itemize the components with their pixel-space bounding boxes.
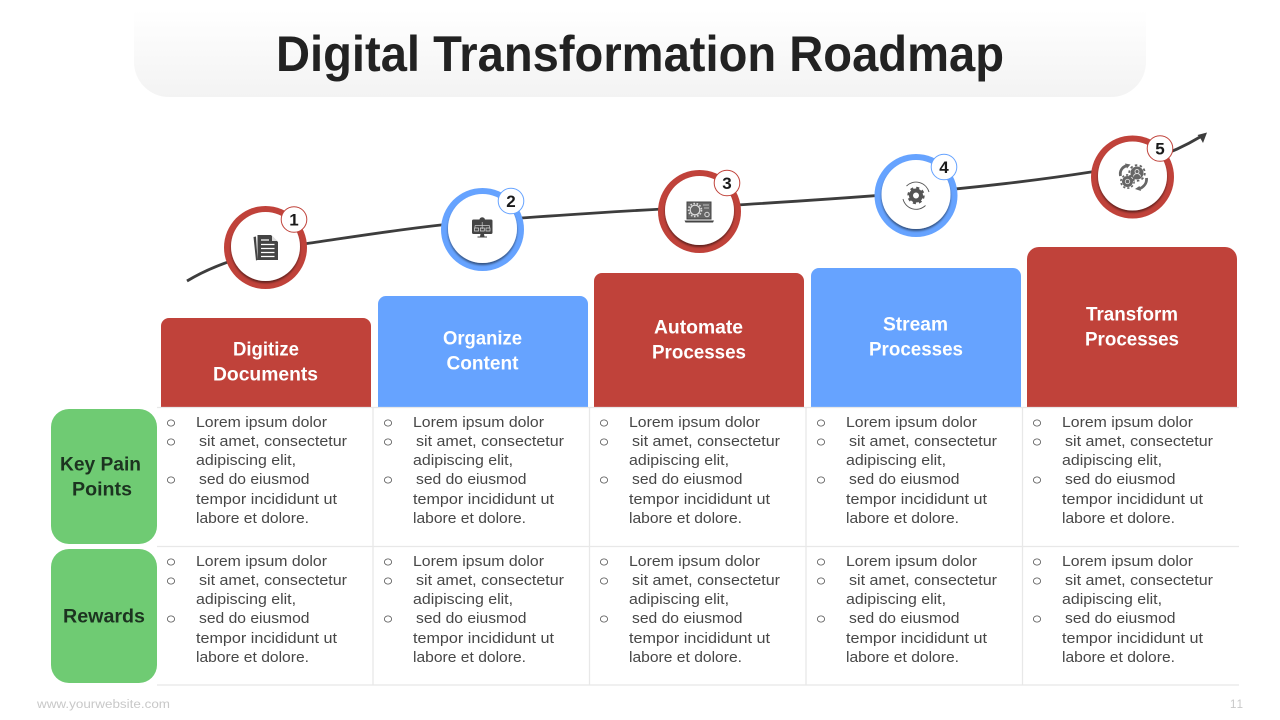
header: Automate Processes — [594, 273, 804, 407]
cell: row 1 column 4: Lorem ipsum dolor — [846, 415, 977, 431]
cell: row 2 column 3: labore et dolore. — [629, 650, 742, 666]
cell: row 1 column 2: sit amet, consectetur — [416, 434, 564, 450]
cell: row 1 column 4: sed do eiusmod — [849, 472, 960, 488]
cell: row 2 column 5: tempor incididunt ut — [1062, 631, 1203, 647]
row label: Rewards — [51, 549, 157, 683]
cell: row 2 column 5: labore et dolore. — [1062, 650, 1175, 666]
header: Automate Processes: Processes — [652, 342, 746, 364]
row label: Rewards: Rewards — [63, 606, 145, 628]
cell: row 2 column 2: sit amet, consectetur — [416, 573, 564, 589]
cell: row 2 column 2: sed do eiusmod — [416, 611, 526, 627]
badge 4: 4 — [939, 158, 949, 177]
header: Organize Content: Content — [446, 354, 519, 374]
cell: row 1 column 2 — [384, 415, 564, 527]
cell: row 2 column 4: labore et dolore. — [846, 650, 959, 666]
cell: row 1 column 3: sed do eiusmod — [632, 472, 742, 488]
cell: row 2 column 4: sed do eiusmod — [849, 611, 960, 627]
cell: row 1 column 3: adipiscing elit, — [629, 453, 729, 469]
cell: row 1 column 2: Lorem ipsum dolor — [413, 415, 544, 431]
cell: row 2 column 2: Lorem ipsum dolor — [413, 554, 544, 570]
badge 5: 5 — [1155, 140, 1165, 158]
badge 3: 3 — [722, 174, 732, 193]
cell: row 1 column 5: sit amet, consectetur — [1065, 434, 1213, 450]
cell: row 1 column 1: sit amet, consectetur — [199, 434, 347, 450]
cell: row 2 column 1 — [167, 554, 347, 666]
row label: Key Pain Points: Key Pain — [60, 454, 141, 476]
cell: row 2 column 1: sed do eiusmod — [199, 611, 310, 627]
header: Stream Processes: Processes — [869, 340, 963, 360]
cell: row 2 column 1: Lorem ipsum dolor — [196, 554, 327, 570]
cell: row 1 column 3: Lorem ipsum dolor — [629, 415, 760, 431]
cell: row 1 column 1: adipiscing elit, — [196, 453, 296, 469]
cell: row 2 column 3: sit amet, consectetur — [632, 573, 780, 589]
cell: row 1 column 2: tempor incididunt ut — [413, 492, 554, 508]
header: Transform Processes — [1027, 247, 1237, 407]
cell: row 1 column 3 — [600, 415, 780, 527]
cell: row 2 column 5: adipiscing elit, — [1062, 592, 1162, 608]
cell: row 1 column 5: adipiscing elit, — [1062, 453, 1162, 469]
cell: row 1 column 5: Lorem ipsum dolor — [1062, 415, 1193, 431]
header: Stream Processes: Stream — [883, 314, 948, 336]
cell: row 2 column 3: tempor incididunt ut — [629, 631, 770, 647]
cell: row 1 column 5: labore et dolore. — [1062, 511, 1175, 527]
icon: laptop with gears — [684, 202, 714, 222]
cell: row 2 column 2: labore et dolore. — [413, 650, 526, 666]
cell: row 1 column 5 — [1033, 415, 1213, 527]
header: Automate Processes: Automate — [654, 318, 743, 338]
cell: row 1 column 4: labore et dolore. — [846, 511, 959, 527]
header: Transform Processes: Processes — [1085, 330, 1179, 350]
title: Digital Transformation Roadmap — [276, 26, 1004, 82]
cell: row 1 column 4 — [817, 415, 997, 527]
page number: 11 — [1230, 699, 1243, 711]
cell: row 2 column 4 — [817, 554, 997, 666]
cell: row 2 column 2: adipiscing elit, — [413, 592, 513, 608]
step 3 marker — [658, 170, 741, 253]
cell: row 2 column 3: sed do eiusmod — [632, 611, 742, 627]
header: Digitize Documents — [161, 318, 371, 407]
step 1 marker — [224, 206, 307, 289]
table grid — [157, 408, 1239, 685]
cell: row 2 column 5: sed do eiusmod — [1065, 611, 1176, 627]
title banner — [134, 10, 1146, 97]
header: Stream Processes — [811, 268, 1021, 407]
cell: row 1 column 3: labore et dolore. — [629, 511, 742, 527]
cell: row 1 column 4: tempor incididunt ut — [846, 492, 987, 508]
cell: row 2 column 1: labore et dolore. — [196, 650, 309, 666]
cell: row 2 column 2 — [384, 554, 564, 666]
cell: row 1 column 1: sed do eiusmod — [199, 472, 310, 488]
cell: row 2 column 3: Lorem ipsum dolor — [629, 554, 760, 570]
cell: row 1 column 5: tempor incididunt ut — [1062, 492, 1203, 508]
cell: row 1 column 3: sit amet, consectetur — [632, 434, 780, 450]
cell: row 1 column 4: sit amet, consectetur — [849, 434, 997, 450]
row label: Key Pain Points — [51, 409, 157, 544]
cell: row 2 column 4: adipiscing elit, — [846, 592, 946, 608]
row label: Key Pain Points: Points — [72, 480, 132, 500]
cell: row 1 column 2: labore et dolore. — [413, 511, 526, 527]
icon: gears with arrows — [1120, 164, 1147, 191]
cell: row 1 column 1: Lorem ipsum dolor — [196, 415, 327, 431]
cell: row 2 column 5 — [1033, 554, 1213, 666]
cell: row 2 column 5: Lorem ipsum dolor — [1062, 554, 1193, 570]
badge 2: 2 — [506, 192, 516, 211]
cell: row 2 column 4: tempor incididunt ut — [846, 631, 987, 647]
icon: gear with cycle arrows — [903, 182, 929, 209]
cell: row 2 column 1: tempor incididunt ut — [196, 631, 337, 647]
cell: row 1 column 3: tempor incididunt ut — [629, 492, 770, 508]
header: Digitize Documents: Documents — [213, 364, 318, 386]
cell: row 1 column 4: adipiscing elit, — [846, 453, 946, 469]
step 5 marker — [1091, 136, 1174, 218]
cell: row 2 column 4: Lorem ipsum dolor — [846, 554, 977, 570]
cell: row 2 column 3: adipiscing elit, — [629, 592, 729, 608]
roadmap arrow curve — [187, 132, 1207, 281]
step 2 marker — [441, 188, 524, 271]
cell: row 1 column 5: sed do eiusmod — [1065, 472, 1176, 488]
cell: row 2 column 1: sit amet, consectetur — [199, 573, 347, 589]
cell: row 1 column 1 — [167, 415, 347, 527]
cell: row 1 column 2: sed do eiusmod — [416, 472, 526, 488]
cell: row 2 column 1: adipiscing elit, — [196, 592, 296, 608]
cell: row 2 column 5: sit amet, consectetur — [1065, 573, 1213, 589]
header: Transform Processes: Transform — [1086, 304, 1178, 326]
header: Organize Content — [378, 296, 588, 407]
header: Digitize Documents: Digitize — [233, 340, 299, 360]
cell: row 2 column 2: tempor incididunt ut — [413, 631, 554, 647]
cell: row 1 column 2: adipiscing elit, — [413, 453, 513, 469]
header: Organize Content: Organize — [443, 328, 522, 350]
cell: row 1 column 1: tempor incididunt ut — [196, 492, 337, 508]
badge 1: 1 — [289, 210, 299, 230]
footer website: www.yourwebsite.com — [36, 699, 170, 711]
cell: row 2 column 4: sit amet, consectetur — [849, 573, 997, 589]
cell: row 1 column 1: labore et dolore. — [196, 511, 309, 527]
icon: documents — [254, 235, 278, 260]
icon: monitor with network — [472, 217, 492, 238]
cell: row 2 column 3 — [600, 554, 780, 666]
step 4 marker — [874, 154, 958, 237]
